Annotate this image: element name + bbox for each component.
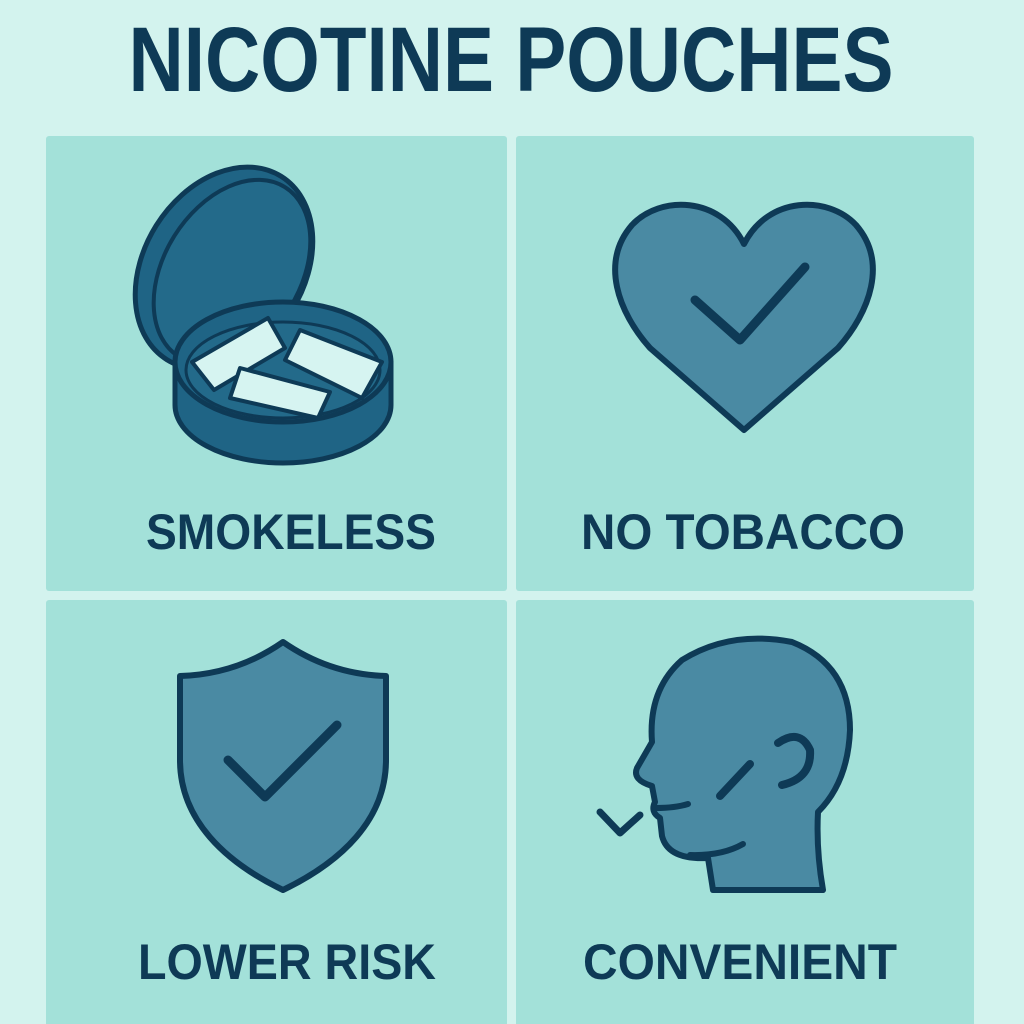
- label: lower risk: LOWER RISK: [138, 934, 436, 990]
- label: smokeless: SMOKELESS: [146, 504, 436, 560]
- icon: pouch tin: [99, 134, 391, 463]
- icon: small check: [600, 812, 640, 833]
- panel: lower risk: [46, 600, 507, 1024]
- icon: shield with check: [180, 642, 386, 890]
- icon: head profile: [600, 639, 850, 890]
- panel: convenient: [516, 600, 974, 1024]
- title: NICOTINE POUCHES: [128, 9, 894, 111]
- icon: heart with check: [615, 205, 873, 430]
- label: no tobacco: NO TOBACCO: [581, 504, 905, 560]
- label: convenient: CONVENIENT: [583, 934, 897, 990]
- panel: smokeless: [46, 134, 507, 591]
- panel: no tobacco: [516, 136, 974, 591]
